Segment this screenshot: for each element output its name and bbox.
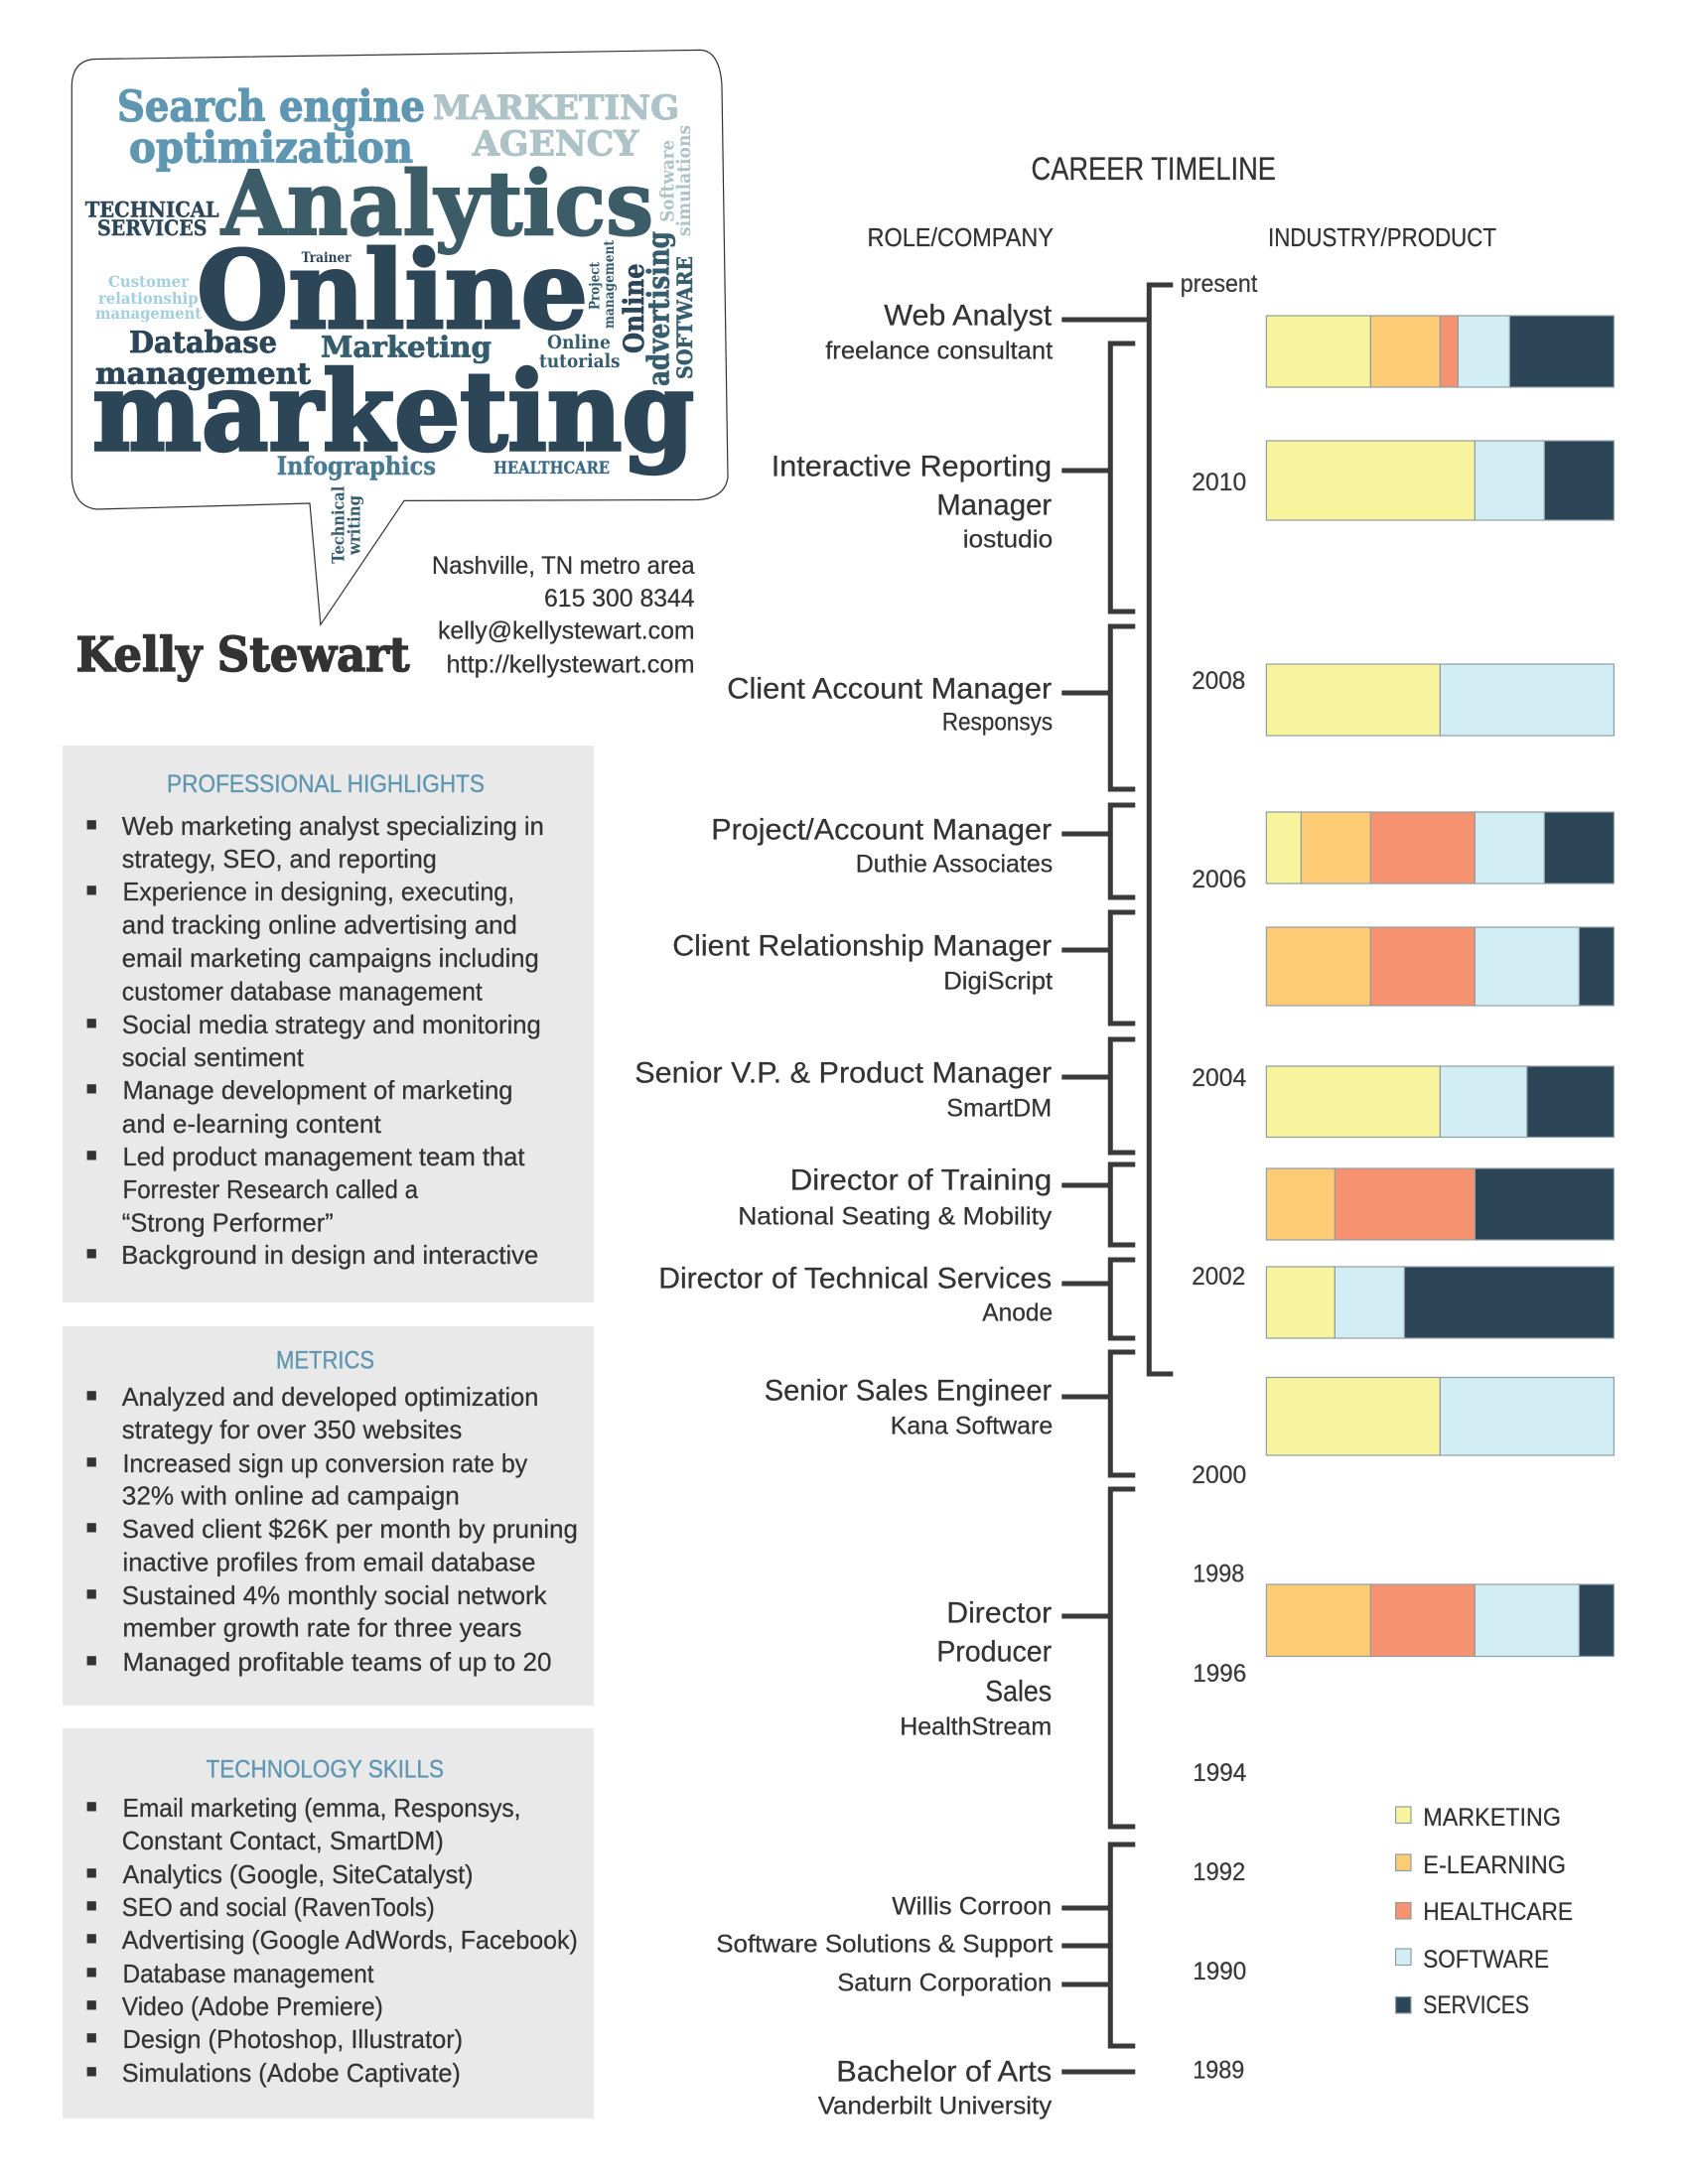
year labels: 2006: [1192, 866, 1246, 893]
word cloud terms: Trainer: [302, 250, 352, 266]
year labels: 2000: [1192, 1461, 1246, 1489]
word cloud terms: Online: [547, 332, 611, 353]
word cloud terms: Online: [618, 263, 650, 353]
bar: senior vp: [1266, 1066, 1614, 1138]
metrics bullet list: 32% with online ad campaign: [122, 1481, 460, 1511]
year labels: present: [1181, 270, 1257, 298]
year labels: 2010: [1192, 469, 1246, 496]
roles and companies: Software Solutions & Support: [716, 1931, 1053, 1959]
skills bullet list: Database management: [123, 1959, 374, 1988]
skills bullet list: Constant Contact, SmartDM): [122, 1826, 444, 1855]
highlights bullet list: email marketing campaigns including: [122, 943, 539, 973]
legend: e-learning: E-LEARNING: [1423, 1851, 1566, 1879]
metrics bullet list: member growth rate for three years: [123, 1612, 522, 1642]
roles and companies: Willis Corroon: [892, 1893, 1052, 1921]
speech bubble word cloud: [71, 50, 728, 624]
word cloud terms: Marketing: [321, 331, 492, 364]
highlights bullet list: and e-learning content: [122, 1109, 382, 1139]
word cloud terms: Infographics: [277, 452, 436, 480]
word cloud terms: advertising: [642, 231, 677, 386]
highlights bullet list: strategy, SEO, and reporting: [122, 844, 437, 874]
roles and companies: Duthie Associates: [856, 851, 1053, 879]
roles and companies: HealthStream: [900, 1713, 1052, 1741]
highlights bullet list: Experience in designing, executing,: [123, 877, 514, 906]
legend: software: SOFTWARE: [1423, 1946, 1549, 1974]
title: career timeline: CAREER TIMELINE: [1031, 151, 1276, 187]
skills bullet list: Analytics (Google, SiteCatalyst): [123, 1859, 474, 1889]
word cloud terms: writing: [346, 495, 365, 556]
legend: services: SERVICES: [1423, 1991, 1529, 2019]
legend: [1396, 1804, 1573, 2019]
roles and companies: Web Analyst: [884, 300, 1053, 333]
roles and companies: Director of Training: [790, 1164, 1052, 1197]
skills bullet list: SEO and social (RavenTools): [122, 1892, 435, 1922]
bar: client relationship manager: [1266, 927, 1614, 1006]
year labels: 1990: [1193, 1958, 1246, 1985]
roles and companies: Interactive Reporting: [772, 451, 1052, 483]
speech bubble outline: [71, 50, 728, 624]
roles and companies: SmartDM: [946, 1095, 1052, 1123]
bar: interactive reporting manager: [1266, 441, 1614, 520]
legend: marketing: MARKETING: [1423, 1804, 1561, 1832]
bar: web analyst: [1266, 316, 1614, 387]
roles and companies: DigiScript: [943, 968, 1053, 996]
metrics bullet list: strategy for over 350 websites: [122, 1415, 462, 1444]
skills bullet list: Email marketing (emma, Responsys,: [123, 1793, 521, 1823]
roles and companies: Producer: [936, 1636, 1052, 1669]
year labels: [1181, 270, 1257, 2085]
year labels: 1994: [1193, 1759, 1246, 1787]
bar: healthstream: [1266, 1584, 1614, 1656]
word cloud terms: Online: [197, 228, 588, 353]
word cloud terms: Analytics: [220, 151, 653, 255]
word cloud terms: Technical: [329, 485, 349, 564]
word cloud terms: [85, 82, 697, 564]
skills bullet list: [87, 1793, 578, 2088]
roles and companies: National Seating & Mobility: [738, 1203, 1053, 1231]
bar: director of training: [1266, 1168, 1614, 1240]
roles and companies: Client Account Manager: [727, 673, 1052, 706]
word cloud terms: HEALTHCARE: [493, 459, 610, 478]
roles and companies: Kana Software: [891, 1413, 1053, 1440]
year labels: 1998: [1193, 1561, 1244, 1588]
contact details: Nashville, TN metro area: [432, 552, 695, 580]
year labels: 2004: [1192, 1064, 1246, 1092]
roles and companies: Senior Sales Engineer: [765, 1375, 1052, 1408]
word cloud terms: SOFTWARE: [672, 256, 697, 379]
contact details: 615 300 8344: [544, 585, 695, 613]
roles and companies: Manager: [936, 489, 1052, 522]
roles and companies: Anode: [982, 1299, 1053, 1327]
roles and companies: [634, 300, 1053, 2120]
metrics bullet list: Analyzed and developed optimization: [122, 1382, 538, 1412]
contact details: http://kellystewart.com: [447, 651, 695, 679]
word cloud terms: Customer: [108, 272, 190, 291]
skills bullet list: Video (Adobe Premiere): [122, 1991, 383, 2021]
word cloud terms: Database: [129, 326, 277, 360]
name heading: Kelly Stewart: [75, 627, 409, 683]
word cloud terms: Search engine: [117, 82, 425, 132]
metrics bullet list: Saved client $26K per month by pruning: [122, 1514, 578, 1544]
year labels: 1989: [1193, 2057, 1244, 2085]
bar: director of technical services: [1266, 1267, 1614, 1338]
bar: client account manager: [1266, 664, 1614, 736]
word cloud terms: management: [95, 357, 311, 391]
year labels: 1992: [1193, 1858, 1245, 1886]
roles and companies: Responsys: [942, 709, 1053, 737]
highlights bullet list: and tracking online advertising and: [122, 909, 517, 939]
roles and companies: Client Relationship Manager: [672, 930, 1052, 963]
word cloud terms: Project: [588, 262, 604, 310]
word cloud terms: tutorials: [539, 350, 621, 372]
skills bullet list: Advertising (Google AdWords, Facebook): [122, 1925, 578, 1955]
contact details: kelly@kellystewart.com: [438, 617, 695, 645]
year labels: 2008: [1192, 667, 1245, 695]
panel: metrics: [63, 1326, 594, 1706]
highlights bullet list: Social media strategy and monitoring: [122, 1010, 541, 1039]
panel: professional highlights: [63, 746, 594, 1302]
roles and companies: Director of Technical Services: [658, 1263, 1052, 1296]
word cloud terms: simulations: [673, 125, 695, 236]
year labels: 2002: [1192, 1263, 1245, 1291]
word cloud terms: MARKETING: [433, 88, 679, 128]
skills bullet list: Design (Photoshop, Illustrator): [123, 2024, 463, 2054]
panel: technology skills: [63, 1728, 594, 2118]
roles and companies: Bachelor of Arts: [836, 2056, 1052, 2089]
stacked industry bars: [1266, 316, 1614, 1656]
roles and companies: Director: [946, 1597, 1052, 1630]
highlights bullet list: social sentiment: [122, 1042, 305, 1072]
roles and companies: Senior V.P. & Product Manager: [634, 1057, 1052, 1090]
metrics bullet list: inactive profiles from email database: [123, 1547, 536, 1576]
heading: professional highlights: PROFESSIONAL HIGHLIGHTS: [167, 770, 485, 798]
timeline brackets and connectors: [1061, 285, 1173, 2072]
legend: healthcare: HEALTHCARE: [1423, 1898, 1573, 1926]
word cloud terms: management: [95, 304, 203, 323]
roles and companies: Vanderbilt University: [818, 2093, 1053, 2120]
word cloud terms: TECHNICAL: [85, 198, 219, 222]
highlights bullet list: Forrester Research called a: [123, 1174, 418, 1204]
heading: metrics: METRICS: [276, 1346, 374, 1374]
highlights bullet list: Manage development of marketing: [123, 1075, 513, 1105]
metrics bullet list: [87, 1382, 578, 1677]
word cloud terms: AGENCY: [472, 124, 639, 165]
highlights bullet list: Web marketing analyst specializing in: [122, 811, 544, 841]
skills bullet list: Simulations (Adobe Captivate): [122, 2058, 461, 2088]
bar: project/account manager: [1266, 812, 1614, 884]
roles and companies: Project/Account Manager: [711, 814, 1052, 847]
bar: senior sales engineer: [1266, 1378, 1614, 1455]
metrics bullet list: Sustained 4% monthly social network: [122, 1580, 547, 1610]
highlights bullet list: “Strong Performer”: [122, 1207, 334, 1237]
highlights bullet list: customer database management: [122, 977, 484, 1007]
word cloud terms: SERVICES: [97, 215, 207, 240]
year labels: 1996: [1193, 1660, 1246, 1688]
word cloud terms: marketing: [92, 347, 694, 476]
metrics bullet list: Managed profitable teams of up to 20: [123, 1647, 552, 1677]
word cloud terms: management: [602, 240, 618, 329]
heading: technology skills: TECHNOLOGY SKILLS: [207, 1755, 444, 1783]
word cloud terms: relationship: [98, 289, 199, 308]
roles and companies: iostudio: [963, 526, 1053, 554]
column heading: industry/product: INDUSTRY/PRODUCT: [1268, 222, 1496, 252]
highlights bullet list: Led product management team that: [123, 1142, 525, 1171]
metrics bullet list: Increased sign up conversion rate by: [123, 1448, 527, 1478]
legend: services: [1396, 1991, 1529, 2019]
word cloud terms: Software: [657, 140, 679, 222]
contact details: [432, 552, 695, 679]
word cloud terms: optimization: [129, 124, 413, 174]
roles and companies: freelance consultant: [825, 338, 1053, 365]
highlights bullet list: [87, 811, 544, 1270]
highlights bullet list: Background in design and interactive: [121, 1240, 538, 1270]
column heading: role/company: ROLE/COMPANY: [868, 222, 1054, 252]
roles and companies: Saturn Corporation: [837, 1970, 1052, 1997]
roles and companies: Sales: [985, 1676, 1052, 1708]
